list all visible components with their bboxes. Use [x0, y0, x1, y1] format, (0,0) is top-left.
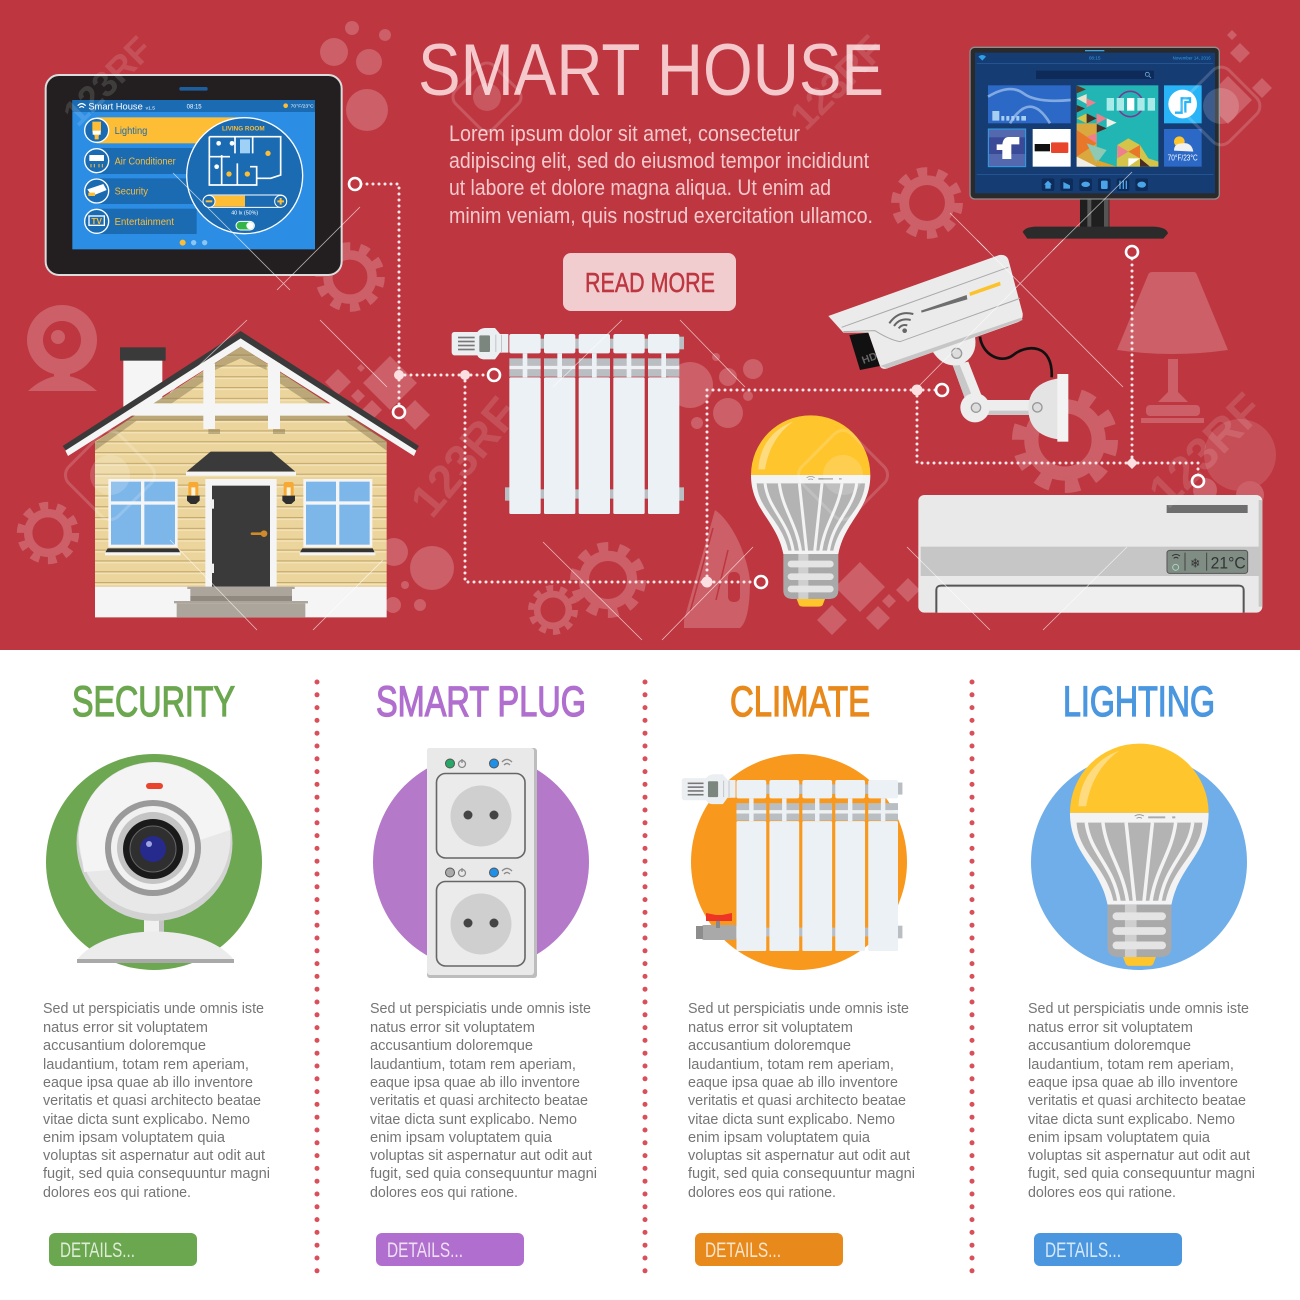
air conditioner: 21°C — [1211, 553, 1246, 572]
button: smart plug details — [376, 1233, 524, 1266]
text: lighting description: accusantium doloremque — [1028, 1038, 1191, 1054]
text: climate description: natus error sit voluptatem — [688, 1020, 853, 1036]
tablet with smart house app: v1.5 — [146, 105, 155, 111]
text: smart plug description — [370, 1001, 597, 1201]
left window — [105, 479, 181, 555]
text: security description: enim ipsam voluptatem quia — [43, 1130, 226, 1146]
walls — [95, 347, 387, 587]
text: climate description: eaque ipsa quae ab illo inventore — [688, 1075, 898, 1091]
text: lighting description — [1028, 1001, 1255, 1201]
tablet with smart house app: TV — [91, 216, 102, 226]
text: smart plug description: natus error sit voluptatem — [370, 1020, 535, 1036]
text: smart plug description: dolores eos qui ratione. — [370, 1185, 518, 1201]
tablet with smart house app — [46, 75, 342, 275]
panel: red hero background — [0, 0, 1300, 650]
intro paragraph: adipiscing elit, sed do eiusmod tempor incididunt — [449, 148, 869, 173]
tablet with smart house app: Lighting — [115, 126, 147, 137]
camera mount arm — [933, 337, 1068, 442]
text: security description: accusantium doloremque — [43, 1038, 206, 1054]
title: SMART HOUSE — [418, 30, 884, 111]
text: climate description: fugit, sed quia consequuntur magni — [688, 1166, 915, 1182]
text: lighting description: enim ipsam voluptatem quia — [1028, 1130, 1211, 1146]
text: security description: vitae dicta sunt explicabo. Nemo — [43, 1112, 250, 1128]
background decoration: gears, circles, diamonds and ghost appliances — [21, 21, 1276, 635]
heading: security: SECURITY — [72, 678, 235, 726]
panel: lighting — [1028, 678, 1255, 1266]
tablet with smart house app: 70°F/23°C — [291, 104, 314, 110]
tablet with smart house app: 40 lx (50%) — [231, 211, 258, 217]
text: climate description: Sed ut perspiciatis unde omnis iste — [688, 1001, 909, 1017]
panel: white lower section — [0, 650, 1300, 1300]
tablet with smart house app: Entertainment — [115, 217, 174, 228]
text: security description: dolores eos qui ratione. — [43, 1185, 191, 1201]
heading: smart plug: SMART PLUG — [376, 678, 586, 726]
house — [63, 331, 419, 617]
door — [205, 479, 277, 587]
chimney — [120, 347, 166, 407]
intro paragraph: minim veniam, quis nostrud exercitation ullamco. — [449, 203, 873, 228]
text: smart plug description: vitae dicta sunt explicabo. Nemo — [370, 1112, 577, 1128]
security camera — [828, 255, 1068, 442]
watermark overlay: 123RF — [1138, 383, 1273, 517]
steps — [174, 587, 308, 617]
camera body — [828, 255, 1023, 370]
ghost icon: table lamp — [1117, 272, 1228, 423]
wall lamps — [187, 482, 295, 504]
text: smart plug description: Sed ut perspiciatis unde omnis iste — [370, 1001, 591, 1017]
heading: climate: CLIMATE — [730, 678, 870, 726]
text: climate description: vitae dicta sunt explicabo. Nemo — [688, 1112, 895, 1128]
text: climate description: accusantium doloremque — [688, 1038, 851, 1054]
text: security description — [43, 1001, 270, 1201]
panel: security — [43, 678, 270, 1266]
text: lighting description: veritatis et quasi architecto beatae — [1028, 1093, 1246, 1109]
button: read more: READ MORE — [585, 267, 715, 298]
right window — [300, 479, 375, 555]
smart TV monitor: November 14, 2016 — [1173, 55, 1211, 60]
intro paragraph: ut labore et dolore magna aliqua. Ut enim ad — [449, 175, 831, 200]
porch awning — [186, 452, 296, 476]
text: smart plug description: accusantium doloremque — [370, 1038, 533, 1054]
text: lighting description: vitae dicta sunt explicabo. Nemo — [1028, 1112, 1235, 1128]
icon: smart sockets on purple circle — [373, 748, 589, 978]
text: climate description: veritatis et quasi architecto beatae — [688, 1093, 906, 1109]
text: security description: laudantium, totam rem aperiam, — [43, 1057, 249, 1073]
connection network lines — [349, 178, 1204, 588]
button: climate details — [695, 1233, 843, 1266]
text: lighting description: voluptas sit aspernatur aut odit aut — [1028, 1148, 1250, 1164]
watermark overlay: 123RF — [400, 387, 528, 526]
tablet with smart house app: LIVING ROOM — [222, 125, 265, 132]
button: climate details: DETAILS... — [705, 1239, 781, 1262]
text: security description: natus error sit voluptatem — [43, 1020, 208, 1036]
button: read more — [563, 253, 736, 311]
text: lighting description: fugit, sed quia consequuntur magni — [1028, 1166, 1255, 1182]
text: climate description — [688, 1001, 915, 1201]
button: security details — [49, 1233, 197, 1266]
text: security description: Sed ut perspiciatis unde omnis iste — [43, 1001, 264, 1017]
text: security description: voluptas sit aspernatur aut odit aut — [43, 1148, 265, 1164]
text: lighting description: eaque ipsa quae ab illo inventore — [1028, 1075, 1238, 1091]
ghost icon: iron — [684, 510, 750, 628]
roof — [63, 331, 419, 456]
text: smart plug description: eaque ipsa quae ab illo inventore — [370, 1075, 580, 1091]
text: smart plug description: voluptas sit aspernatur aut odit aut — [370, 1148, 592, 1164]
icon: webcam on green circle — [46, 754, 262, 970]
smart TV monitor: 70°F/23°C — [1168, 154, 1198, 163]
intro paragraph: Lorem ipsum dolor sit amet, consectetur — [449, 121, 800, 146]
text: climate description: voluptas sit aspernatur aut odit aut — [688, 1148, 910, 1164]
text: lighting description: natus error sit voluptatem — [1028, 1020, 1193, 1036]
watermark overlay: 123RF — [55, 28, 160, 134]
text: lighting description: dolores eos qui ratione. — [1028, 1185, 1176, 1201]
button: lighting details: DETAILS... — [1045, 1239, 1121, 1262]
smart TV monitor — [970, 47, 1219, 239]
text: climate description: enim ipsam voluptatem quia — [688, 1130, 871, 1146]
text: climate description: dolores eos qui ratione. — [688, 1185, 836, 1201]
button: security details: DETAILS... — [60, 1239, 135, 1262]
button: smart plug details: DETAILS... — [387, 1239, 463, 1262]
text: smart plug description: enim ipsam voluptatem quia — [370, 1130, 553, 1146]
smart TV monitor: 08:15 — [1089, 56, 1101, 61]
text: smart plug description: fugit, sed quia consequuntur magni — [370, 1166, 597, 1182]
tablet with smart house app: 08:15 — [187, 105, 202, 111]
air conditioner — [918, 495, 1262, 613]
cable — [980, 337, 1052, 377]
tablet with smart house app: Security — [115, 187, 148, 198]
text: smart plug description: laudantium, totam rem aperiam, — [370, 1057, 576, 1073]
watermark overlay — [55, 28, 1273, 640]
heading: lighting: LIGHTING — [1063, 678, 1215, 726]
text: security description: eaque ipsa quae ab illo inventore — [43, 1075, 253, 1091]
panel: smart plug — [370, 678, 597, 1266]
watermark overlay: 123RF — [783, 28, 893, 138]
tablet with smart house app: Smart House — [88, 101, 143, 111]
text: lighting description: Sed ut perspiciatis unde omnis iste — [1028, 1001, 1249, 1017]
text: lighting description: laudantium, totam rem aperiam, — [1028, 1057, 1234, 1073]
text: smart plug description: veritatis et quasi architecto beatae — [370, 1093, 588, 1109]
panel: climate — [682, 678, 915, 1266]
text: security description: fugit, sed quia consequuntur magni — [43, 1166, 270, 1182]
intro paragraph — [449, 121, 873, 228]
column dividers — [317, 682, 972, 1272]
text: climate description: laudantium, totam rem aperiam, — [688, 1057, 894, 1073]
LED bulb — [751, 415, 870, 607]
tablet with smart house app: Air Conditioner — [115, 156, 176, 167]
icon: bulb on blue circle — [1031, 744, 1247, 970]
ghost icon: webcam — [27, 305, 97, 391]
text: security description: veritatis et quasi architecto beatae — [43, 1093, 261, 1109]
air conditioner: ❄ — [1190, 556, 1201, 570]
icon: radiator on orange circle — [682, 754, 907, 970]
camera body: HD — [860, 350, 879, 367]
radiator — [452, 328, 684, 514]
button: lighting details — [1034, 1233, 1182, 1266]
